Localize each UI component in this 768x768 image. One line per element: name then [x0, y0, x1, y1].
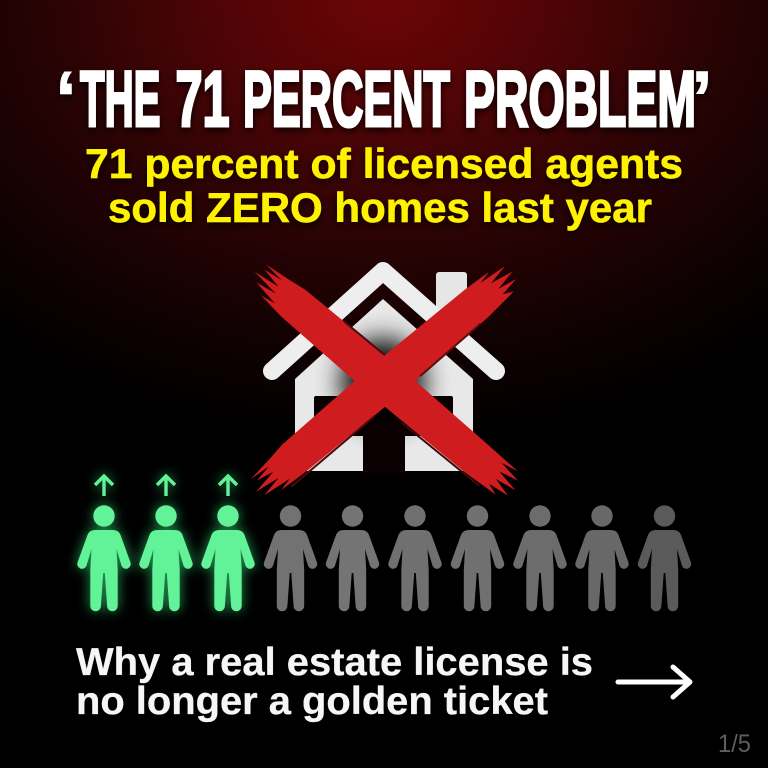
title: THE	[80, 54, 160, 143]
person 7	[451, 505, 504, 611]
person 10	[638, 505, 691, 611]
green highlighted people	[77, 476, 255, 611]
door	[363, 405, 405, 475]
call to action text: no longer a golden ticket	[76, 680, 548, 723]
page number: 1/5	[718, 730, 751, 758]
icon: red X	[241, 255, 528, 508]
person 3	[201, 476, 255, 611]
title: 71	[176, 54, 230, 143]
call to action text: Why a real estate license is	[76, 641, 593, 684]
person 4	[264, 505, 317, 611]
title	[55, 54, 713, 143]
person 6	[388, 505, 442, 611]
chimney	[436, 272, 467, 322]
call to action text	[76, 641, 593, 723]
person 5	[326, 505, 379, 611]
icon: crossed-out house	[250, 262, 518, 496]
shading	[341, 338, 425, 426]
arrow	[618, 667, 690, 697]
grey people	[264, 505, 691, 611]
subtitle	[85, 140, 683, 231]
window band	[314, 396, 453, 436]
person 9	[575, 505, 629, 611]
person 1	[77, 476, 131, 611]
subtitle: sold ZERO homes last year	[108, 184, 652, 231]
subtitle: 71 percent of licensed agents	[85, 140, 683, 187]
people row	[77, 476, 691, 611]
roof	[272, 271, 496, 371]
title: ’	[691, 54, 713, 143]
title: ‘	[55, 54, 77, 143]
title: PERCENT	[243, 54, 450, 143]
house body	[295, 299, 473, 471]
person 2	[139, 476, 193, 611]
icon: house	[272, 271, 496, 475]
person 8	[513, 505, 567, 611]
